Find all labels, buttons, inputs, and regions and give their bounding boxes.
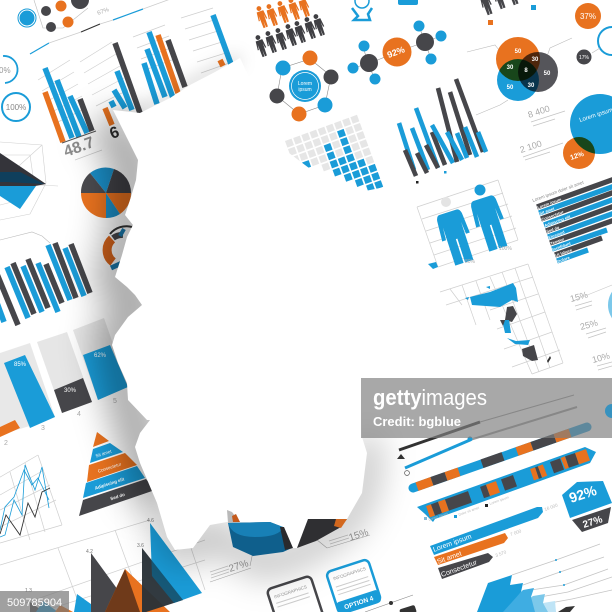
labels: person values: 100% [499, 246, 512, 252]
chart: horizontal striped bars: Lorem ipsum dolor sit amet [532, 179, 585, 203]
chart: pie [81, 168, 131, 218]
diagram: lorem circle with stats: 12% [569, 151, 586, 162]
label: 27% callout [210, 547, 254, 582]
chart: horizontal striped bars [532, 177, 612, 264]
icon: top blue tab [398, 0, 418, 5]
chart: 3D pie [227, 510, 347, 556]
card: option 4 blue: OPTION 4 [343, 595, 375, 611]
chart: radar [0, 142, 58, 220]
label: 85%: 85% [14, 362, 27, 368]
diagram: hub network: Lorem [298, 81, 312, 87]
badge: 92% and 27%: 92% [567, 482, 599, 506]
stats: right percentages: 15% [569, 290, 589, 304]
card: infographics dark: INFOGRAPHICS [273, 584, 308, 600]
chart: horizontal striped bars: Eiusmod [548, 229, 566, 240]
diagram: venn: 50 [544, 71, 551, 77]
bar chart: centre paired bars [399, 79, 486, 184]
icon: top blue user [352, 0, 372, 20]
figure: right person [468, 194, 512, 253]
diagram: hub network: ipsum [298, 87, 312, 93]
chart: horizontal striped bars: Incididunt [552, 240, 572, 252]
label: 62%: 62% [94, 353, 107, 359]
labels: triangle values [25, 518, 154, 594]
watermark: getty images banner [361, 378, 612, 438]
arrow bars: lorem ipsum, sit amet, consectetur: 7 000 [510, 528, 522, 537]
diagram: right circles 37% [575, 3, 612, 64]
chart: pyramid: Consectetur [97, 461, 122, 474]
chart: horizontal striped bars: Ut labore [555, 247, 573, 258]
icons: top dark people and legend [477, 0, 536, 25]
icons: top people rows [253, 0, 327, 58]
text: second stat digit: 6 [108, 124, 122, 143]
labels: triangle values: 3.6 [137, 543, 144, 549]
chart: line chart [0, 455, 62, 543]
chart: pyramid: Adipiscing elit [94, 476, 125, 491]
diagram: venn: 50 [515, 49, 522, 55]
diagram: orange bubble network: 92% [386, 44, 406, 60]
axis labels: 2 [4, 440, 8, 447]
card: option 4 blue: INFOGRAPHICS [332, 566, 367, 581]
timeline lines under watermark [397, 395, 577, 475]
label: 27% callout: 27% [228, 558, 250, 575]
chart: blue staircase area [477, 544, 612, 612]
card: option 4 blue [326, 559, 382, 612]
diagram: venn: 30 [528, 83, 535, 89]
chart: horizontal striped bars: Dolore [557, 255, 571, 264]
axis labels: 3 [41, 425, 45, 432]
axis labels: 5 [113, 398, 117, 405]
legend: ribbon legend: Dolor sit amet [458, 506, 480, 517]
labels: triangle values: 1.3 [25, 588, 32, 594]
arrow bars: lorem ipsum, sit amet, consectetur: Sit amet [436, 551, 463, 566]
watermark: image id: 509785904 [7, 597, 62, 609]
diagram: lorem circle with stats: 2 100 [519, 138, 543, 155]
arrow bars: lorem ipsum, sit amet, consectetur: 3 570 [495, 549, 507, 558]
diagram: right circles 37%: 17% [579, 55, 590, 61]
shadow: map cut-out left and bottom [105, 58, 368, 565]
stats: right percentages: 10% [591, 351, 611, 365]
diagram: right circles 37%: 37% [580, 12, 596, 21]
bar chart: top left group [38, 8, 232, 142]
arrow bars: lorem ipsum, sit amet, consectetur: Consectetur [440, 559, 479, 579]
badge: 92% and 27%: 27% [582, 514, 604, 531]
watermark: getty images banner: Credit: bgblue [373, 415, 461, 429]
panel: progress rings: 100% [6, 103, 26, 112]
chart: pyramid: Sit amet [95, 448, 113, 459]
chart: horizontal striped bars: Tempor [550, 236, 565, 246]
watermark: image id [0, 591, 69, 612]
card: infographics dark [267, 575, 324, 612]
labels: person values: 80% [465, 259, 476, 265]
label: 15% callout: 15% [348, 527, 370, 544]
chart: pyramid [79, 432, 155, 516]
chart: horizontal striped bars: Lorem ipsum [537, 196, 562, 210]
chart: pyramid: Sed do [110, 492, 126, 501]
diagram: venn: 30 [532, 57, 539, 63]
bar chart: percentage columns [0, 318, 128, 447]
arrow bars: lorem ipsum, sit amet, consectetur: 16 000 [544, 502, 559, 512]
shape: white country silhouette [112, 58, 490, 550]
arrow bars: lorem ipsum, sit amet, consectetur [430, 502, 559, 579]
diagram: venn: 30 [507, 65, 514, 71]
chart: world map grid [440, 264, 563, 374]
diagram: hub network [270, 50, 338, 122]
chart: waffle grid [288, 116, 380, 213]
label: 30%: 30% [64, 388, 77, 394]
badge: 92% and 27% [562, 481, 612, 532]
chart: person pictogram [417, 180, 518, 269]
label: 15% callout [311, 527, 370, 548]
diagram: venn: 50 [507, 85, 514, 91]
diagram: orange bubble network [348, 20, 446, 84]
chart: horizontal striped bars: Sit amet [539, 206, 556, 216]
stats: right percentages [569, 281, 612, 370]
legend: ribbon legend [424, 495, 509, 522]
labels: triangle values: 4.6 [147, 518, 154, 524]
chart: overlapping triangles [0, 500, 205, 612]
legend: ribbon legend: Lorem ipsum [428, 511, 448, 522]
diagram: lorem circle with stats: 8 400 [527, 103, 551, 120]
chart: horizontal striped bars: Adipiscing elit [544, 214, 572, 228]
axis labels [4, 398, 117, 447]
panel: top-left circles and timeline [18, 0, 176, 54]
bar chart: paired bars left [0, 232, 90, 325]
chart: horizontal striped bars: Sed do [546, 224, 560, 234]
diagram: lorem circle with stats [519, 94, 612, 169]
ribbon: flag striped bar [417, 447, 596, 522]
labels: person values [465, 246, 512, 265]
figure: left person [434, 208, 478, 267]
watermark: getty images banner: gettyimages [373, 385, 487, 410]
diagram: venn [467, 37, 572, 115]
panel: progress rings [0, 56, 30, 121]
legend: ribbon legend: Lorem ipsum [489, 495, 509, 506]
axis labels: 4 [77, 411, 81, 418]
ribbon: rounded striped bar [413, 427, 587, 488]
panel: top-left circles and timeline: 67% [97, 7, 111, 17]
small dark marker bottom [365, 595, 417, 612]
text: 48.7 stat: 48.7 [62, 134, 97, 161]
labels: triangle values: 4.2 [86, 549, 93, 555]
arrow bars: lorem ipsum, sit amet, consectetur: Lorem ipsum [432, 533, 473, 554]
mini map fragment [428, 262, 438, 269]
chart: small dial ring [107, 226, 132, 268]
stats: right percentages: 25% [579, 318, 599, 332]
diagram: venn: 8 [524, 68, 528, 74]
chart: horizontal striped bars: Consectetur [541, 209, 565, 222]
